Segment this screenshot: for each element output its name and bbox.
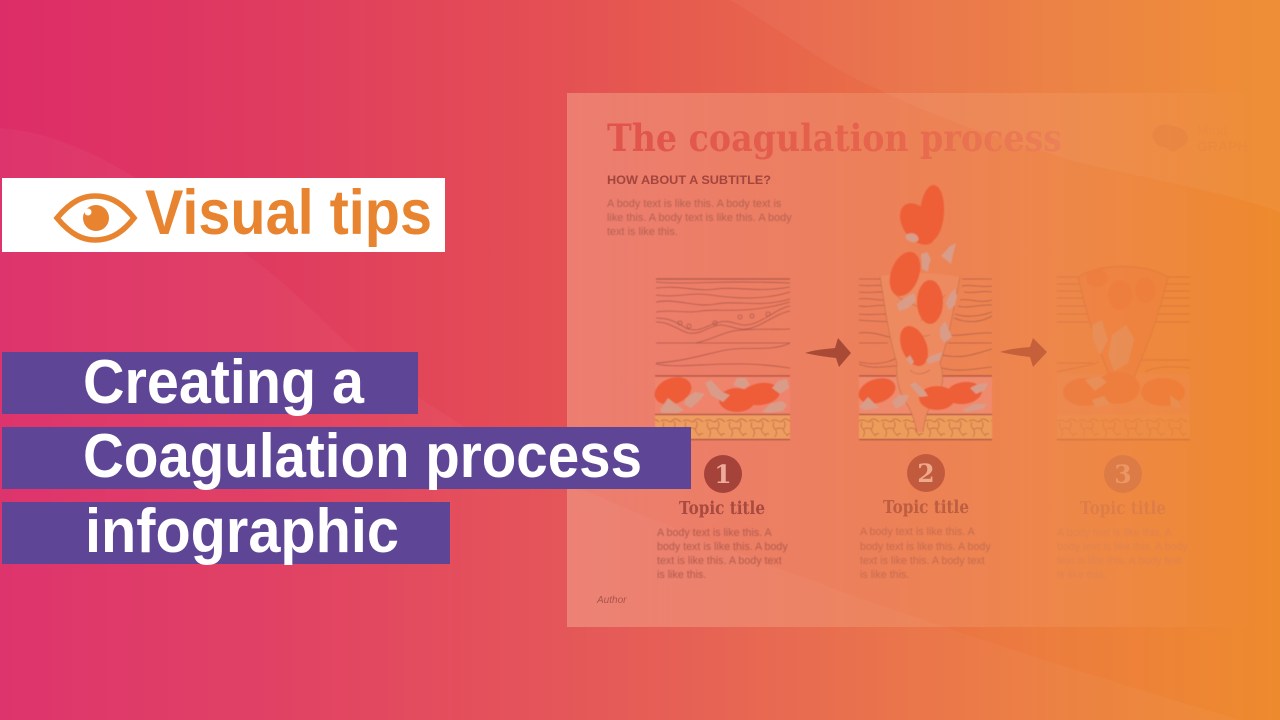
arrow 1: [805, 338, 851, 367]
step 1 body: body text is like this. A body: [657, 541, 788, 553]
step 3 body: is like this.: [1057, 569, 1106, 581]
preview intro text: A body text is like this. A body text is: [607, 198, 782, 210]
platelets: [859, 233, 988, 412]
step 2 body: A body text is like this. A: [860, 526, 976, 538]
panel: faded infographic preview: [567, 93, 1280, 627]
clot body: [1078, 266, 1168, 382]
step 2 badge: [907, 454, 945, 492]
step 1 title: Topic title: [679, 499, 765, 519]
red blood cells: [651, 372, 781, 412]
step 1 body: text is like this. A body text: [657, 555, 782, 567]
step 3 body: A body text is like this. A: [1057, 527, 1173, 539]
step 2 body: text is like this. A body text: [860, 555, 985, 567]
preview logo: Mind: [1197, 122, 1227, 138]
step 1 badge: 1: [714, 460, 732, 489]
background wave lower left: [0, 128, 1240, 720]
preview intro text: like this. A body text is like this. A body: [607, 212, 792, 224]
step 3 body: text is like this. A body text: [1057, 555, 1182, 567]
preview logo: [1153, 122, 1248, 154]
step 3 body: [1057, 527, 1188, 581]
heading line 2: Coagulation process: [83, 422, 642, 491]
background wave upper right: [730, 0, 1280, 212]
banner: Visual tips: [2, 178, 445, 252]
preview logo: GRAPH: [1197, 138, 1248, 154]
step 1 body: [657, 527, 788, 581]
step 3 title: Topic title: [1080, 499, 1166, 519]
illustration 3: clot, faded: [1057, 266, 1190, 440]
wound edges: [880, 276, 960, 432]
platelets: [660, 378, 789, 413]
step 3 badge: [1104, 455, 1142, 493]
step 2 badge: 2: [917, 459, 935, 488]
step 1 body: is like this.: [657, 569, 706, 581]
icon: eye: [57, 196, 134, 240]
heading line 1: Creating a: [83, 348, 364, 417]
step 1 badge: [704, 455, 742, 493]
step 3 badge: 3: [1114, 460, 1132, 489]
illustration 2: wound: [855, 184, 992, 440]
preview intro text: [607, 198, 792, 238]
step 2 body: is like this.: [860, 569, 909, 581]
banner label: Visual tips: [145, 178, 432, 248]
wound channel: [880, 273, 960, 432]
step 1 body: A body text is like this. A: [657, 527, 773, 539]
step 2 title: Topic title: [883, 498, 969, 518]
preview sheet: [567, 93, 1280, 627]
arrow 2: [1000, 338, 1047, 367]
author credit: Author: [596, 595, 627, 606]
preview intro text: text is like this.: [607, 226, 678, 238]
step 3 body: body text is like this. A body: [1057, 541, 1188, 553]
step 2 body: body text is like this. A body: [860, 541, 991, 553]
preview title: The coagulation process: [607, 116, 1062, 160]
preview subtitle: HOW ABOUT A SUBTITLE?: [607, 175, 771, 187]
red blood cells: [855, 184, 983, 410]
heading line 3: infographic: [85, 497, 399, 566]
step 2 body: [860, 526, 991, 581]
illustration 1: intact skin: [651, 279, 790, 440]
